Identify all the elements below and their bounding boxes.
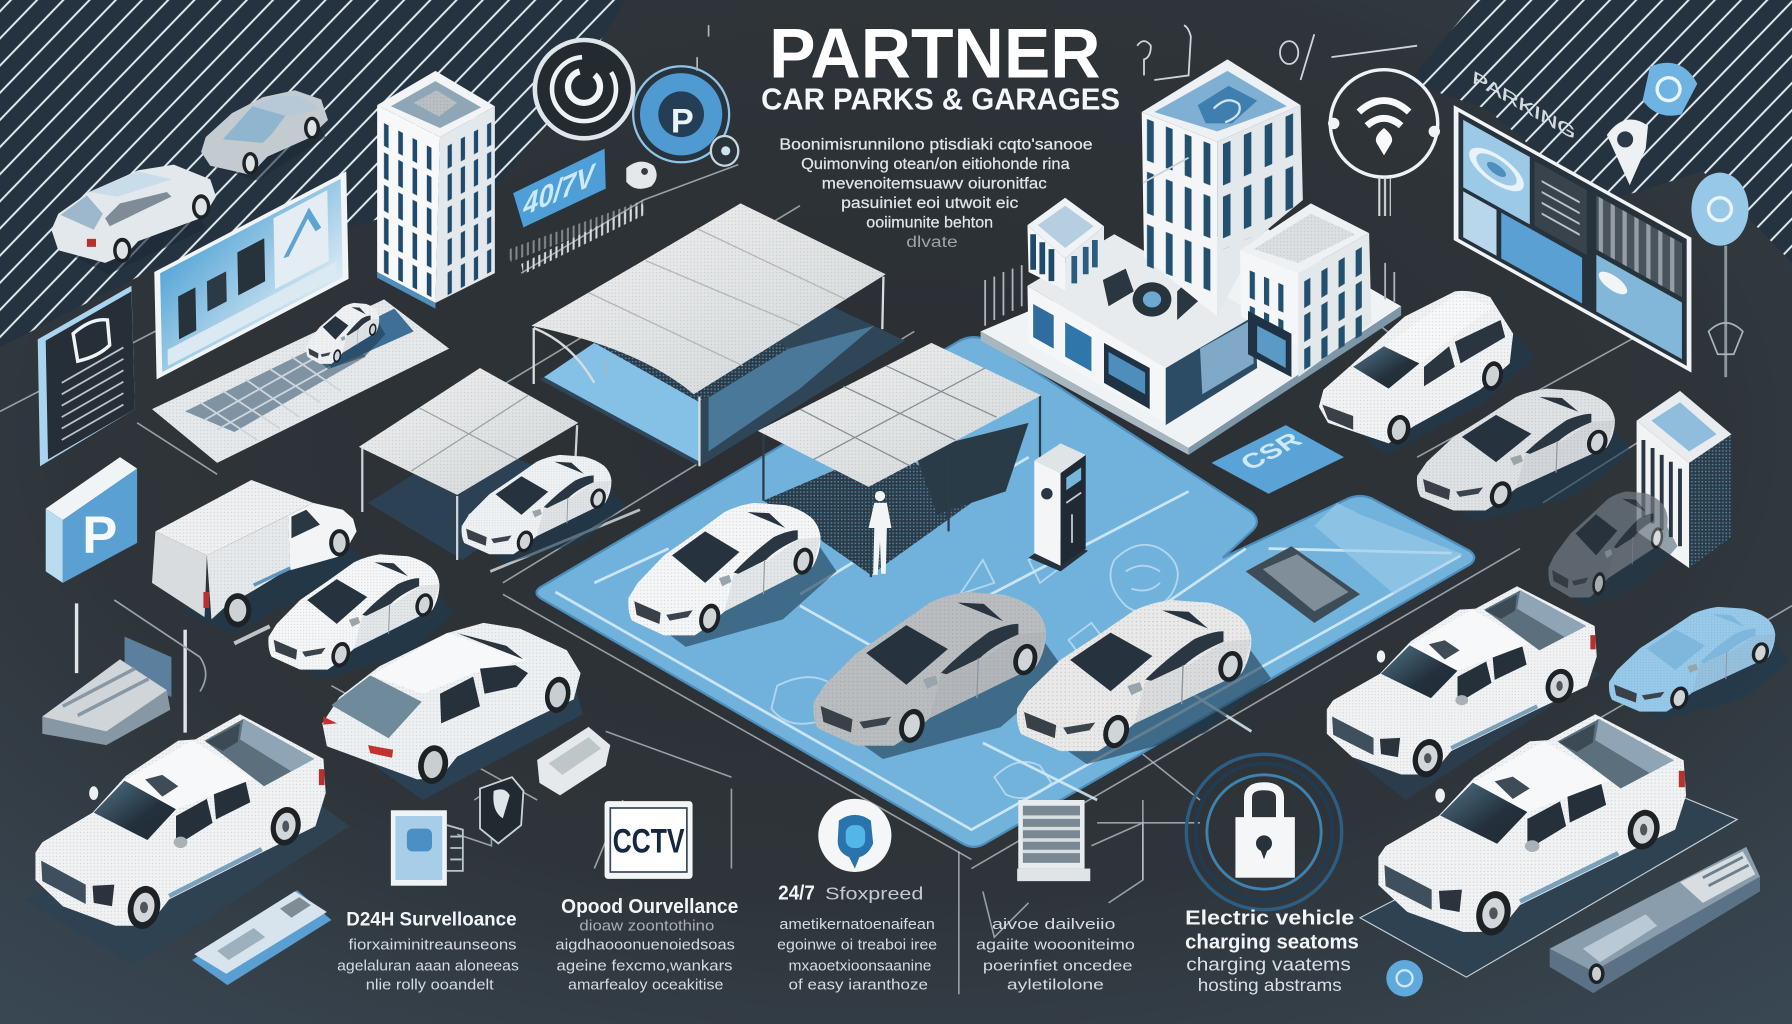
icon: CCTV box xyxy=(605,801,693,879)
blue floor tile: CSR xyxy=(1234,428,1308,475)
car: silver sedan xyxy=(813,592,1065,759)
icon: ring target xyxy=(535,40,633,138)
P parking sign xyxy=(46,457,137,583)
pickup: right upper xyxy=(1327,586,1600,800)
left tower building xyxy=(377,71,495,309)
right small tower xyxy=(1637,391,1731,568)
car: faded grey car xyxy=(1548,491,1678,607)
text column: 24/7: ametikernatoenaifean xyxy=(779,917,935,933)
small car lower right xyxy=(1550,847,1760,993)
car: white sedan left xyxy=(268,554,454,680)
icon: white pin xyxy=(1607,119,1648,185)
car: main white sedan xyxy=(628,503,837,647)
icon: document card xyxy=(391,810,463,886)
ground-left equipment xyxy=(42,600,206,745)
top-right striped backdrop xyxy=(1408,0,1792,263)
car: pearl sedan xyxy=(1017,600,1271,764)
text column: surveillance: dioaw zoontothino xyxy=(579,918,714,934)
title: CAR PARKS & GARAGES xyxy=(761,82,1120,117)
key fob xyxy=(192,890,331,985)
text column: 24H surveillance xyxy=(337,909,519,994)
canopy: centre lot xyxy=(758,343,1041,577)
canopy: large xyxy=(531,203,905,466)
blue small badge xyxy=(1386,960,1423,997)
text column: fourth xyxy=(976,917,1135,994)
terrace furniture xyxy=(1133,282,1171,317)
intro text block: Boonimisrunnilono ptisdiaki cqto'sanooe xyxy=(779,137,1093,154)
car: white sedan by medium canopy xyxy=(462,455,624,563)
text column: fourth: agaiite woooniteimo xyxy=(976,938,1135,954)
text column: fourth: ayletilolone xyxy=(1007,978,1104,994)
text column: 24H surveillance: agelaluran aaan aloneeas xyxy=(337,958,519,974)
car: silver sedan right xyxy=(1417,389,1631,521)
pickup: right lower xyxy=(1360,714,1737,977)
text column: electric vehicle: charging seatoms xyxy=(1185,931,1359,954)
text column: 24/7: of easy iaranthoze xyxy=(789,978,928,994)
24/7 tag: 40/7V xyxy=(523,157,596,223)
text column: 24H surveillance: nlie rolly ooandelt xyxy=(366,978,495,994)
text column: surveillance: ageine fexcmo,wankars xyxy=(557,958,733,974)
panel: blue parking lot xyxy=(537,337,1474,847)
parking bay lines xyxy=(555,457,1461,830)
hatch band doodles xyxy=(469,25,709,523)
text column: 24H surveillance: fiorxaiminitreaunseons xyxy=(349,938,517,954)
text column: 24/7 xyxy=(777,881,937,994)
text column: surveillance xyxy=(555,895,738,994)
icon: blue P ring: P xyxy=(671,103,694,141)
P parking sign: P xyxy=(82,506,117,565)
text column: surveillance: Opood Ourvellance xyxy=(561,895,738,918)
faded floor pictograms xyxy=(771,545,1178,798)
left monitor xyxy=(154,171,349,379)
small tub icon xyxy=(537,727,610,795)
text column: surveillance: aigdhaooonuenoiedsoas xyxy=(555,938,735,954)
car: light blue sedan xyxy=(1609,607,1789,721)
text column: electric vehicle: hosting abstrams xyxy=(1198,975,1342,995)
intro text block: dlvate xyxy=(906,234,958,251)
main tower xyxy=(1142,112,1217,317)
text column: surveillance: amarfealoy oceakitise xyxy=(568,978,723,994)
shield badge icon xyxy=(480,777,523,843)
car: white SUV rear view xyxy=(322,623,583,800)
intro text block: mevenoitemsuawv oiuronitfac xyxy=(822,176,1047,193)
top doodle icons xyxy=(1137,25,1417,183)
right block xyxy=(1240,250,1298,346)
pickup: left xyxy=(23,714,350,965)
right dashboard monitor xyxy=(1454,105,1691,373)
light tile with shadow shape xyxy=(1314,503,1463,594)
intro text block: ooiimunite behton xyxy=(866,214,993,231)
text column: 24H surveillance: D24H Survelloance xyxy=(346,909,517,931)
PARKING skewed label: PARKING xyxy=(1472,67,1576,144)
icon: padlock with rings xyxy=(1186,754,1342,910)
text column: fourth: poerinfiet oncedee xyxy=(983,958,1133,974)
podium xyxy=(1027,286,1166,423)
lower doodles and connectors xyxy=(457,731,1200,994)
intro text block: pasuiniet eoi utwoit eic xyxy=(841,195,1019,212)
icon: blue balloon with stem xyxy=(1691,173,1749,377)
intro text block xyxy=(779,137,1093,251)
car: white hatchback, top left xyxy=(51,165,216,274)
blue floor tile xyxy=(1211,425,1344,494)
top-left striped backdrop xyxy=(0,0,626,347)
info sign panel xyxy=(38,286,135,466)
EV charging station xyxy=(1029,443,1088,571)
panel: right building complex xyxy=(981,59,1401,455)
car: silver sports car, top left xyxy=(201,90,328,181)
text column: fourth: aivoe dailveiio xyxy=(992,917,1115,933)
van xyxy=(152,480,366,634)
icon: CCTV box: CCTV xyxy=(613,823,685,861)
text column: electric vehicle: charging vaatems xyxy=(1186,953,1351,974)
icon: laptop xyxy=(1017,800,1090,881)
text column: 24/7: Sfoxpreed xyxy=(825,883,923,903)
title: PARTNER xyxy=(769,15,1101,94)
fence xyxy=(985,265,1022,326)
icon: wifi ring xyxy=(1328,70,1440,216)
car: white SUV right xyxy=(1319,291,1535,455)
canopy: medium xyxy=(359,368,578,560)
icon: blue map marker xyxy=(1636,56,1701,122)
text column: electric vehicle: Electric vehicle xyxy=(1185,907,1354,930)
left block xyxy=(1027,225,1065,290)
person figure xyxy=(869,491,891,575)
text column: 24/7: 24/7 xyxy=(778,881,815,904)
text column: electric vehicle xyxy=(1185,907,1359,995)
plaza plate xyxy=(981,223,1401,448)
icon: blue P ring xyxy=(633,66,729,162)
keyboard desk with car xyxy=(152,299,449,463)
icon: 24/7 chat pin xyxy=(818,799,891,872)
icon: small eye badge xyxy=(711,136,738,166)
text column: 24/7: egoinwe oi treaboi iree xyxy=(777,938,937,954)
road markings xyxy=(0,165,1792,869)
intro text block: Quimonving otean/on eitiohonde rina xyxy=(801,156,1070,173)
text column: 24/7: mxaoetxioonsaanine xyxy=(789,958,931,974)
